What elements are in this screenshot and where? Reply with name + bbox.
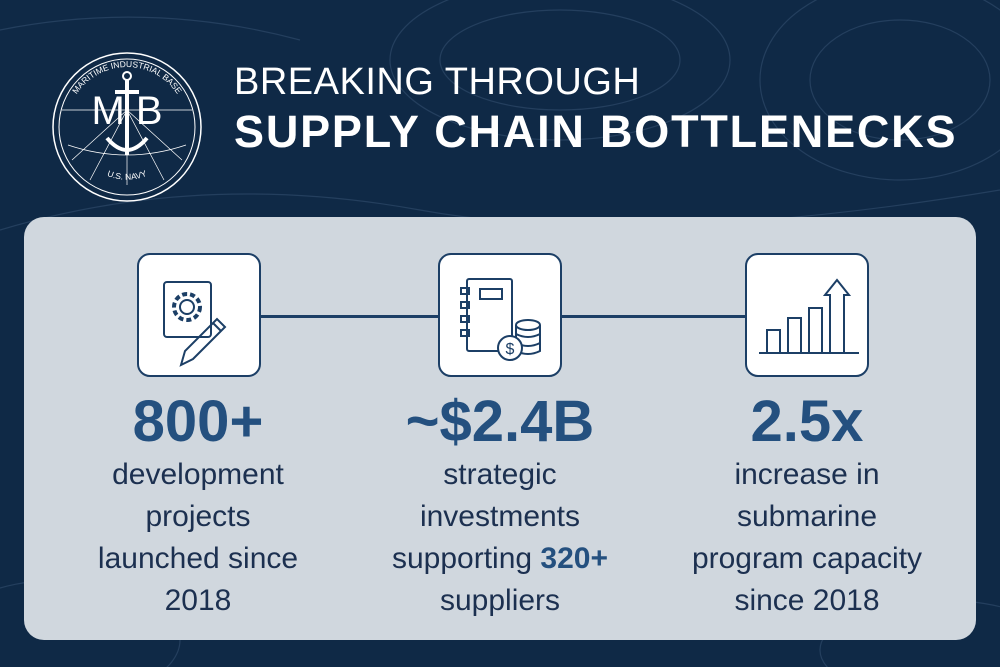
logo: M B: [91, 89, 163, 133]
stat: 800+: development: [112, 458, 284, 491]
stat: 2.5x: submarine: [737, 500, 877, 533]
stat: 2.5x: program capacity: [692, 542, 922, 575]
icon: gear and pencil: [137, 253, 261, 377]
stat: 800+: projects: [145, 500, 251, 533]
stat: 2.5x: increase in: [734, 458, 880, 491]
icon: notebook and coins: [438, 253, 562, 377]
stat: $2.4B: suppliers: [440, 584, 560, 617]
stat: 800+: 2018: [165, 584, 231, 617]
stat: 2.5x: 2.5x: [751, 389, 863, 454]
stat: $2.4B: supporting 320+: [392, 542, 608, 575]
logo: [52, 52, 202, 202]
title: [234, 61, 957, 157]
stat: $2.4B: ~$2.4B: [406, 389, 594, 454]
panel: [24, 217, 976, 640]
logo: MARITIME INDUSTRIAL BASE: [72, 61, 182, 94]
stat: 800+: [98, 389, 298, 617]
logo: U.S. NAVY: [108, 170, 146, 180]
stat: $2.4B: investments: [420, 500, 580, 533]
stat: 800+: 800+: [133, 389, 263, 454]
icon: notebook and coins: $: [506, 341, 515, 358]
connector line: [260, 315, 750, 318]
title: SUPPLY CHAIN BOTTLENECKS: [234, 106, 957, 157]
stat: $2.4B: [392, 389, 608, 617]
stat: 2.5x: since 2018: [734, 584, 880, 617]
stat: 2.5x: [692, 389, 922, 617]
stat: $2.4B: strategic: [443, 458, 557, 491]
title: BREAKING THROUGH: [234, 61, 640, 103]
icon: bar chart with arrow: [745, 253, 869, 377]
stat: 800+: launched since: [98, 542, 298, 575]
